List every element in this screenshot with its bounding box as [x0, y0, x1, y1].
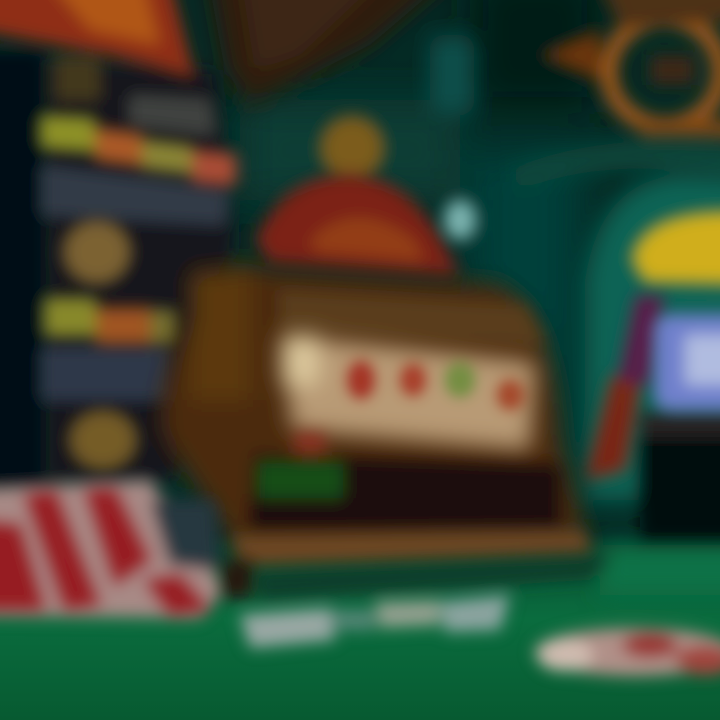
dome: [255, 175, 458, 275]
wall shading: [240, 0, 600, 510]
right machine: [585, 175, 720, 540]
teal arch: [585, 175, 720, 500]
reel symbols: [346, 360, 524, 411]
side strip: [585, 295, 664, 480]
felt highlight: [600, 545, 720, 595]
gold chip upper: [63, 220, 131, 284]
highlight spot: [444, 200, 476, 240]
dark base: [640, 412, 720, 540]
chip stripes: [0, 488, 210, 615]
dark object by chips: [222, 560, 252, 598]
reel screen: [282, 335, 535, 450]
top right ornament: [540, 0, 720, 140]
blue screen: [655, 315, 720, 410]
tower upper bars: [40, 115, 236, 186]
top beam: [205, 0, 470, 105]
tower lower bars: [44, 298, 176, 344]
marquee panel: [280, 290, 545, 345]
roof top left: [0, 0, 195, 78]
chip stack lower left: [0, 480, 225, 618]
machine body: [161, 263, 585, 545]
teal curved sweep: [510, 141, 720, 190]
shadow under machine: [250, 555, 610, 600]
yellow topper: [632, 212, 720, 285]
slot machine: [161, 116, 592, 566]
left tower dark side: [0, 50, 45, 490]
lower cabinet: [250, 432, 560, 530]
chips on felt right: [535, 628, 720, 676]
left tower body: [40, 55, 235, 480]
gold chip lower: [69, 410, 137, 470]
machine base: [232, 530, 592, 566]
knob: [320, 116, 384, 180]
scattered cards: [240, 595, 510, 648]
hanging teal lantern: [430, 35, 474, 115]
